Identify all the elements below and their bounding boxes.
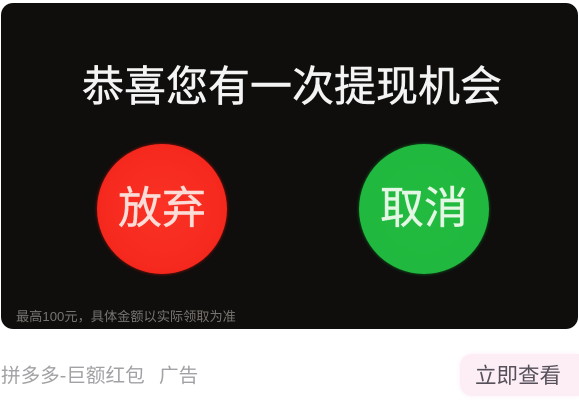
button label: cancel: 取消 (380, 184, 468, 233)
title: 恭喜您有一次提现机会 (82, 63, 502, 110)
ad label: 广告 (159, 365, 198, 387)
disclaimer note: 最高100元，具体金额以实际领取为准 (16, 309, 236, 324)
call to action button (460, 354, 579, 396)
button: cancel (green) (359, 144, 489, 274)
call to action label: 立即查看 (475, 364, 561, 388)
advertiser source text: 拼多多-巨额红包 (1, 365, 145, 387)
panel: dark popup card (1, 3, 578, 329)
button label: give up: 放弃 (118, 184, 206, 233)
button: give up (red) (97, 144, 227, 274)
